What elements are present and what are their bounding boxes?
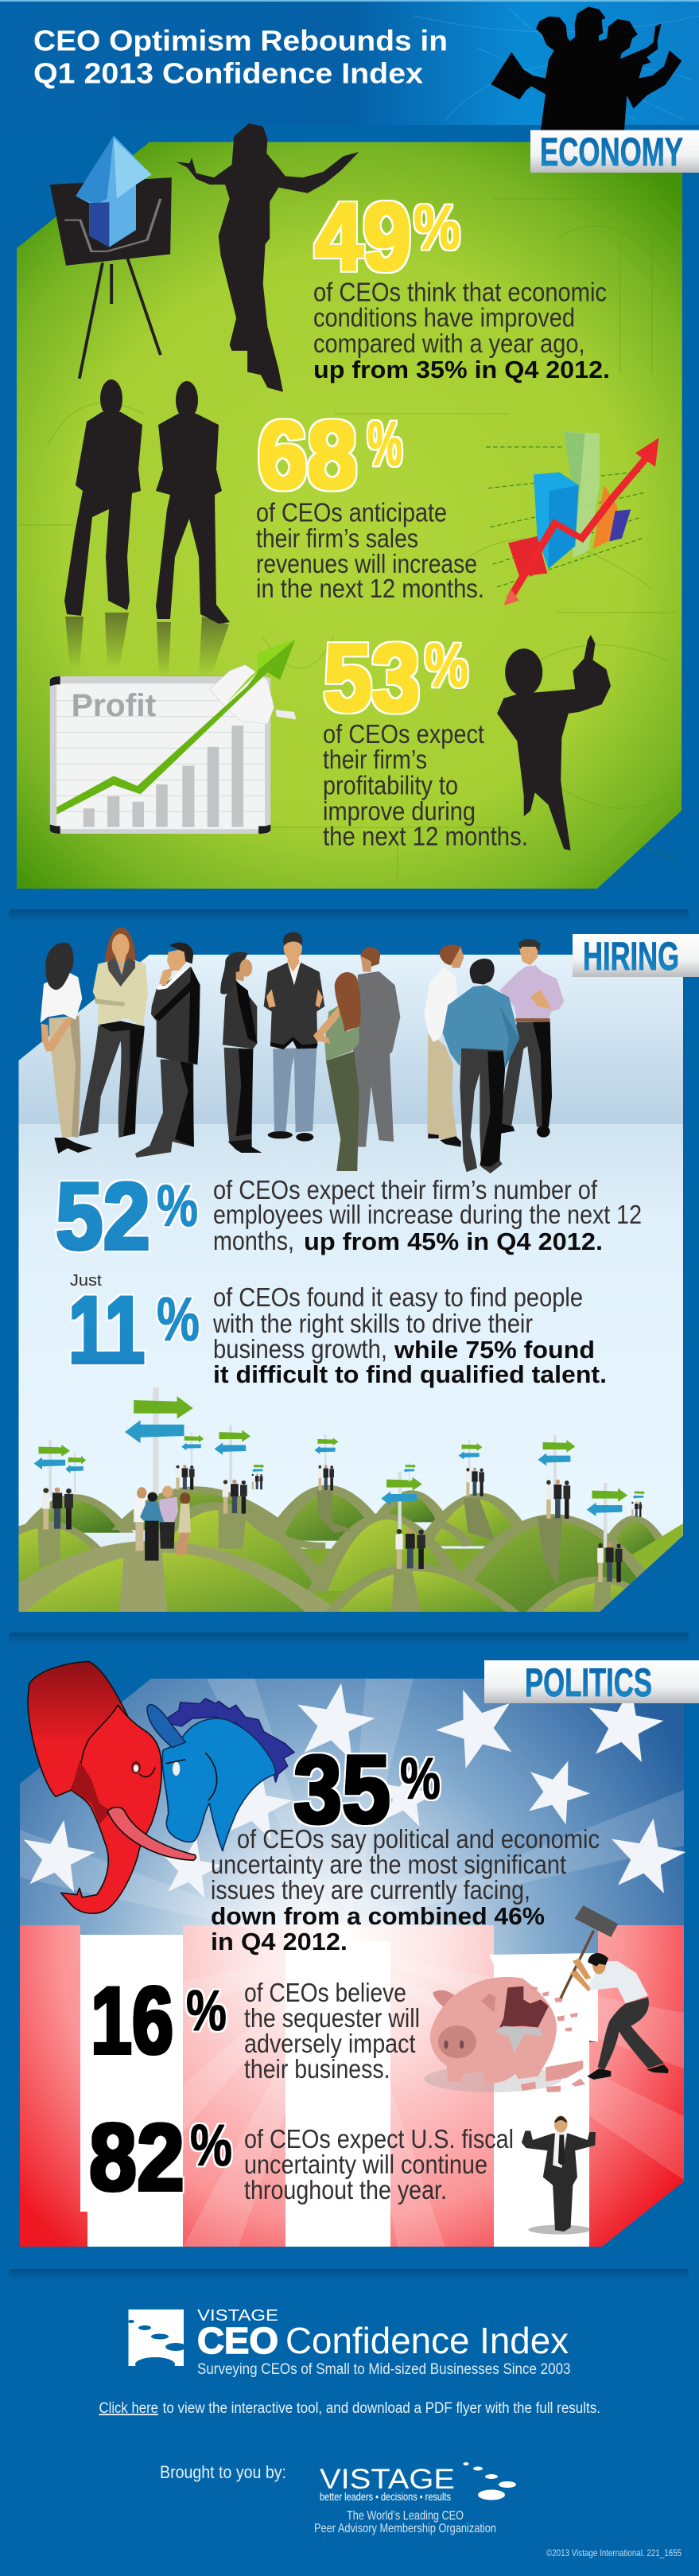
text: 82% description [244,2124,514,2204]
text: click here line: Click here [99,2400,158,2417]
text: brought to you by: Brought to you by: [160,2462,286,2482]
person: woman in tan trousers [41,943,92,1154]
text: 11% description: with the right skills to drive their [212,1309,533,1338]
text: 16% description: the sequester will [244,2003,420,2033]
icon: easel with blue arrow [50,136,172,379]
text: Vistage tagline [314,2509,496,2535]
people: large foreground group [134,1486,191,1561]
statistic: 52%: 52 [56,1163,150,1270]
statistic: 68%: 68 [258,403,357,509]
panel: politics [16,1661,690,2247]
statistic: 11%: % [157,1284,200,1354]
person: man in lilac shirt [499,939,564,1138]
panel: hiring [0,928,683,1617]
text: 35% description: uncertainty are the most significant [211,1850,566,1879]
text: 82% description: throughout the year. [244,2175,447,2204]
title: Q1 2013 Confidence Index [33,57,423,90]
text: just: Just [70,1272,102,1290]
footer: CEO Confidence Index logo [128,2307,571,2378]
statistic: 52%: % [157,1173,198,1239]
text: 68% description: of CEOs anticipate [256,498,447,527]
footer: CEO Confidence Index logo: VISTAGE [197,2307,278,2325]
people: left group [41,928,361,1171]
statistic: 82%: % [190,2112,232,2178]
divider shadow [9,909,689,922]
person: businessman with raised fists [522,2115,596,2235]
text: 52% description: of CEOs expect their firm’s number of [213,1175,598,1204]
statistic: 49%: 49 [315,184,411,290]
statistic: 49%: % [414,192,460,263]
text: 11% description: it difficult to find qualified talent. [213,1360,607,1388]
icon: logo square [128,2309,186,2372]
divider shadow [9,1632,689,1645]
person: man in blazer and jeans [264,932,324,1142]
icon: profit whiteboard with arrow: Profit [72,687,156,723]
text: 52% description: months, [213,1226,294,1255]
text: 16% description: their business. [244,2054,390,2084]
footer: Vistage logo [320,2462,516,2503]
statistic: 82%: 82 [89,2104,184,2211]
text: 11% description: business growth, [213,1334,387,1364]
statistic: 68%: % [367,408,402,479]
panel: economy [17,123,684,889]
text: 49% description: up from 35% in Q4 2012. [313,356,610,383]
statistic: 35%: % [400,1745,441,1811]
silhouette: woman with raised arms [176,123,359,392]
text: 49% description: conditions have improved [313,302,575,333]
text: 49% description [313,277,610,383]
text: 35% description [211,1824,600,1955]
icon: man smashing piggy bank with hammer [424,1905,669,2092]
statistic: 35%: 35 [293,1735,390,1843]
chart: 3D bars with red rising arrow [486,432,659,605]
text: 16% description: of CEOs believe [244,1978,406,2007]
person: man with hammer [570,1953,669,2080]
person: woman in black suit [220,951,262,1153]
text: 82% description: uncertainty will continue [244,2150,487,2179]
footer: CEO Confidence Index logo: Surveying CEOs of Small to Mid-sized Businesses Since 2003 [197,2361,571,2378]
divider shadow [9,2269,689,2280]
person: woman in beige blazer [79,928,148,1138]
text: 53% description: improve during [323,796,476,826]
footer: CEO Confidence Index logo: Confidence Index [285,2320,569,2361]
text: 53% description: of CEOs expect [323,719,484,749]
text: 53% description [323,719,528,851]
icon: hammer [561,1905,618,1998]
text: 49% description: of CEOs think that economic [313,277,607,307]
illustration: business people standing [41,928,564,1173]
text: 53% description: their firm’s [323,745,427,774]
statistic: 16%: % [186,1979,227,2043]
text: click here line: to view the interactive tool, and download a PDF flyer with the full results. [163,2400,600,2417]
icon: stars [16,1676,690,1901]
text: 35% description: issues they are currently facing, [211,1875,530,1905]
text: 52% description [213,1175,642,1255]
person: woman in green dress [313,972,361,1171]
text: 52% description: employees will increase during the next 12 [213,1200,642,1229]
text: 68% description: revenues will increase [256,549,477,578]
icon: profit whiteboard with arrow [50,640,296,834]
statistic: 16%: 16 [91,1967,173,2074]
text: 11% description [212,1282,607,1388]
silhouette: person with thumb up [497,635,611,850]
text: 68% description: their firm’s sales [256,523,418,553]
text: 52% description: up from 45% in Q4 2012. [304,1228,603,1255]
person: man in black suit, hand to chin [135,943,200,1158]
text: 53% description: the next 12 months. [323,821,528,851]
statistic: 53%: 53 [324,625,420,731]
text: 35% description: down from a combined 46% [211,1902,545,1930]
icon: piggy bank [424,1977,585,2092]
person: man in blue shirt from behind [443,959,519,1173]
text: Vistage tagline: The World’s Leading CEO [347,2509,464,2523]
statistic: 53%: % [425,630,468,700]
person: man in white shirt [424,944,464,1147]
silhouette: two businessmen [64,379,230,676]
statistic: 11%: 11 [68,1277,145,1383]
illustration: green hills with signposts and people [0,1387,683,1617]
text: 11% description: while 75% found [394,1336,595,1364]
text: 68% description: in the next 12 months. [256,574,484,603]
text: 35% description: of CEOs say political and economic [237,1824,600,1854]
text: 16% description: adversely impact [244,2029,415,2058]
title: CEO Optimism Rebounds in [33,24,448,57]
text: 82% description: of CEOs expect U.S. fiscal [244,2124,514,2154]
silhouette: three people with papers [491,6,682,130]
illustration: red elephant and blue donkey [28,1661,294,1913]
header band [0,0,699,125]
text: 16% description [244,1978,420,2084]
text: 35% description: in Q4 2012. [211,1928,348,1955]
text: 49% description: compared with a year ago, [313,329,585,358]
text: 53% description: profitability to [323,771,458,800]
person: man in grey suit [352,947,400,1147]
footer: CEO Confidence Index logo: CEO [197,2320,278,2361]
footer: Vistage logo: better leaders • decisions • results [320,2490,451,2503]
people: right group [424,939,564,1173]
text: Vistage tagline: Peer Advisory Membership Organization [314,2522,496,2535]
text: 11% description: of CEOs found it easy to find people [213,1282,583,1312]
text: 68% description [256,498,484,603]
title [33,24,448,90]
footer: Vistage logo: VISTAGE [320,2464,455,2495]
